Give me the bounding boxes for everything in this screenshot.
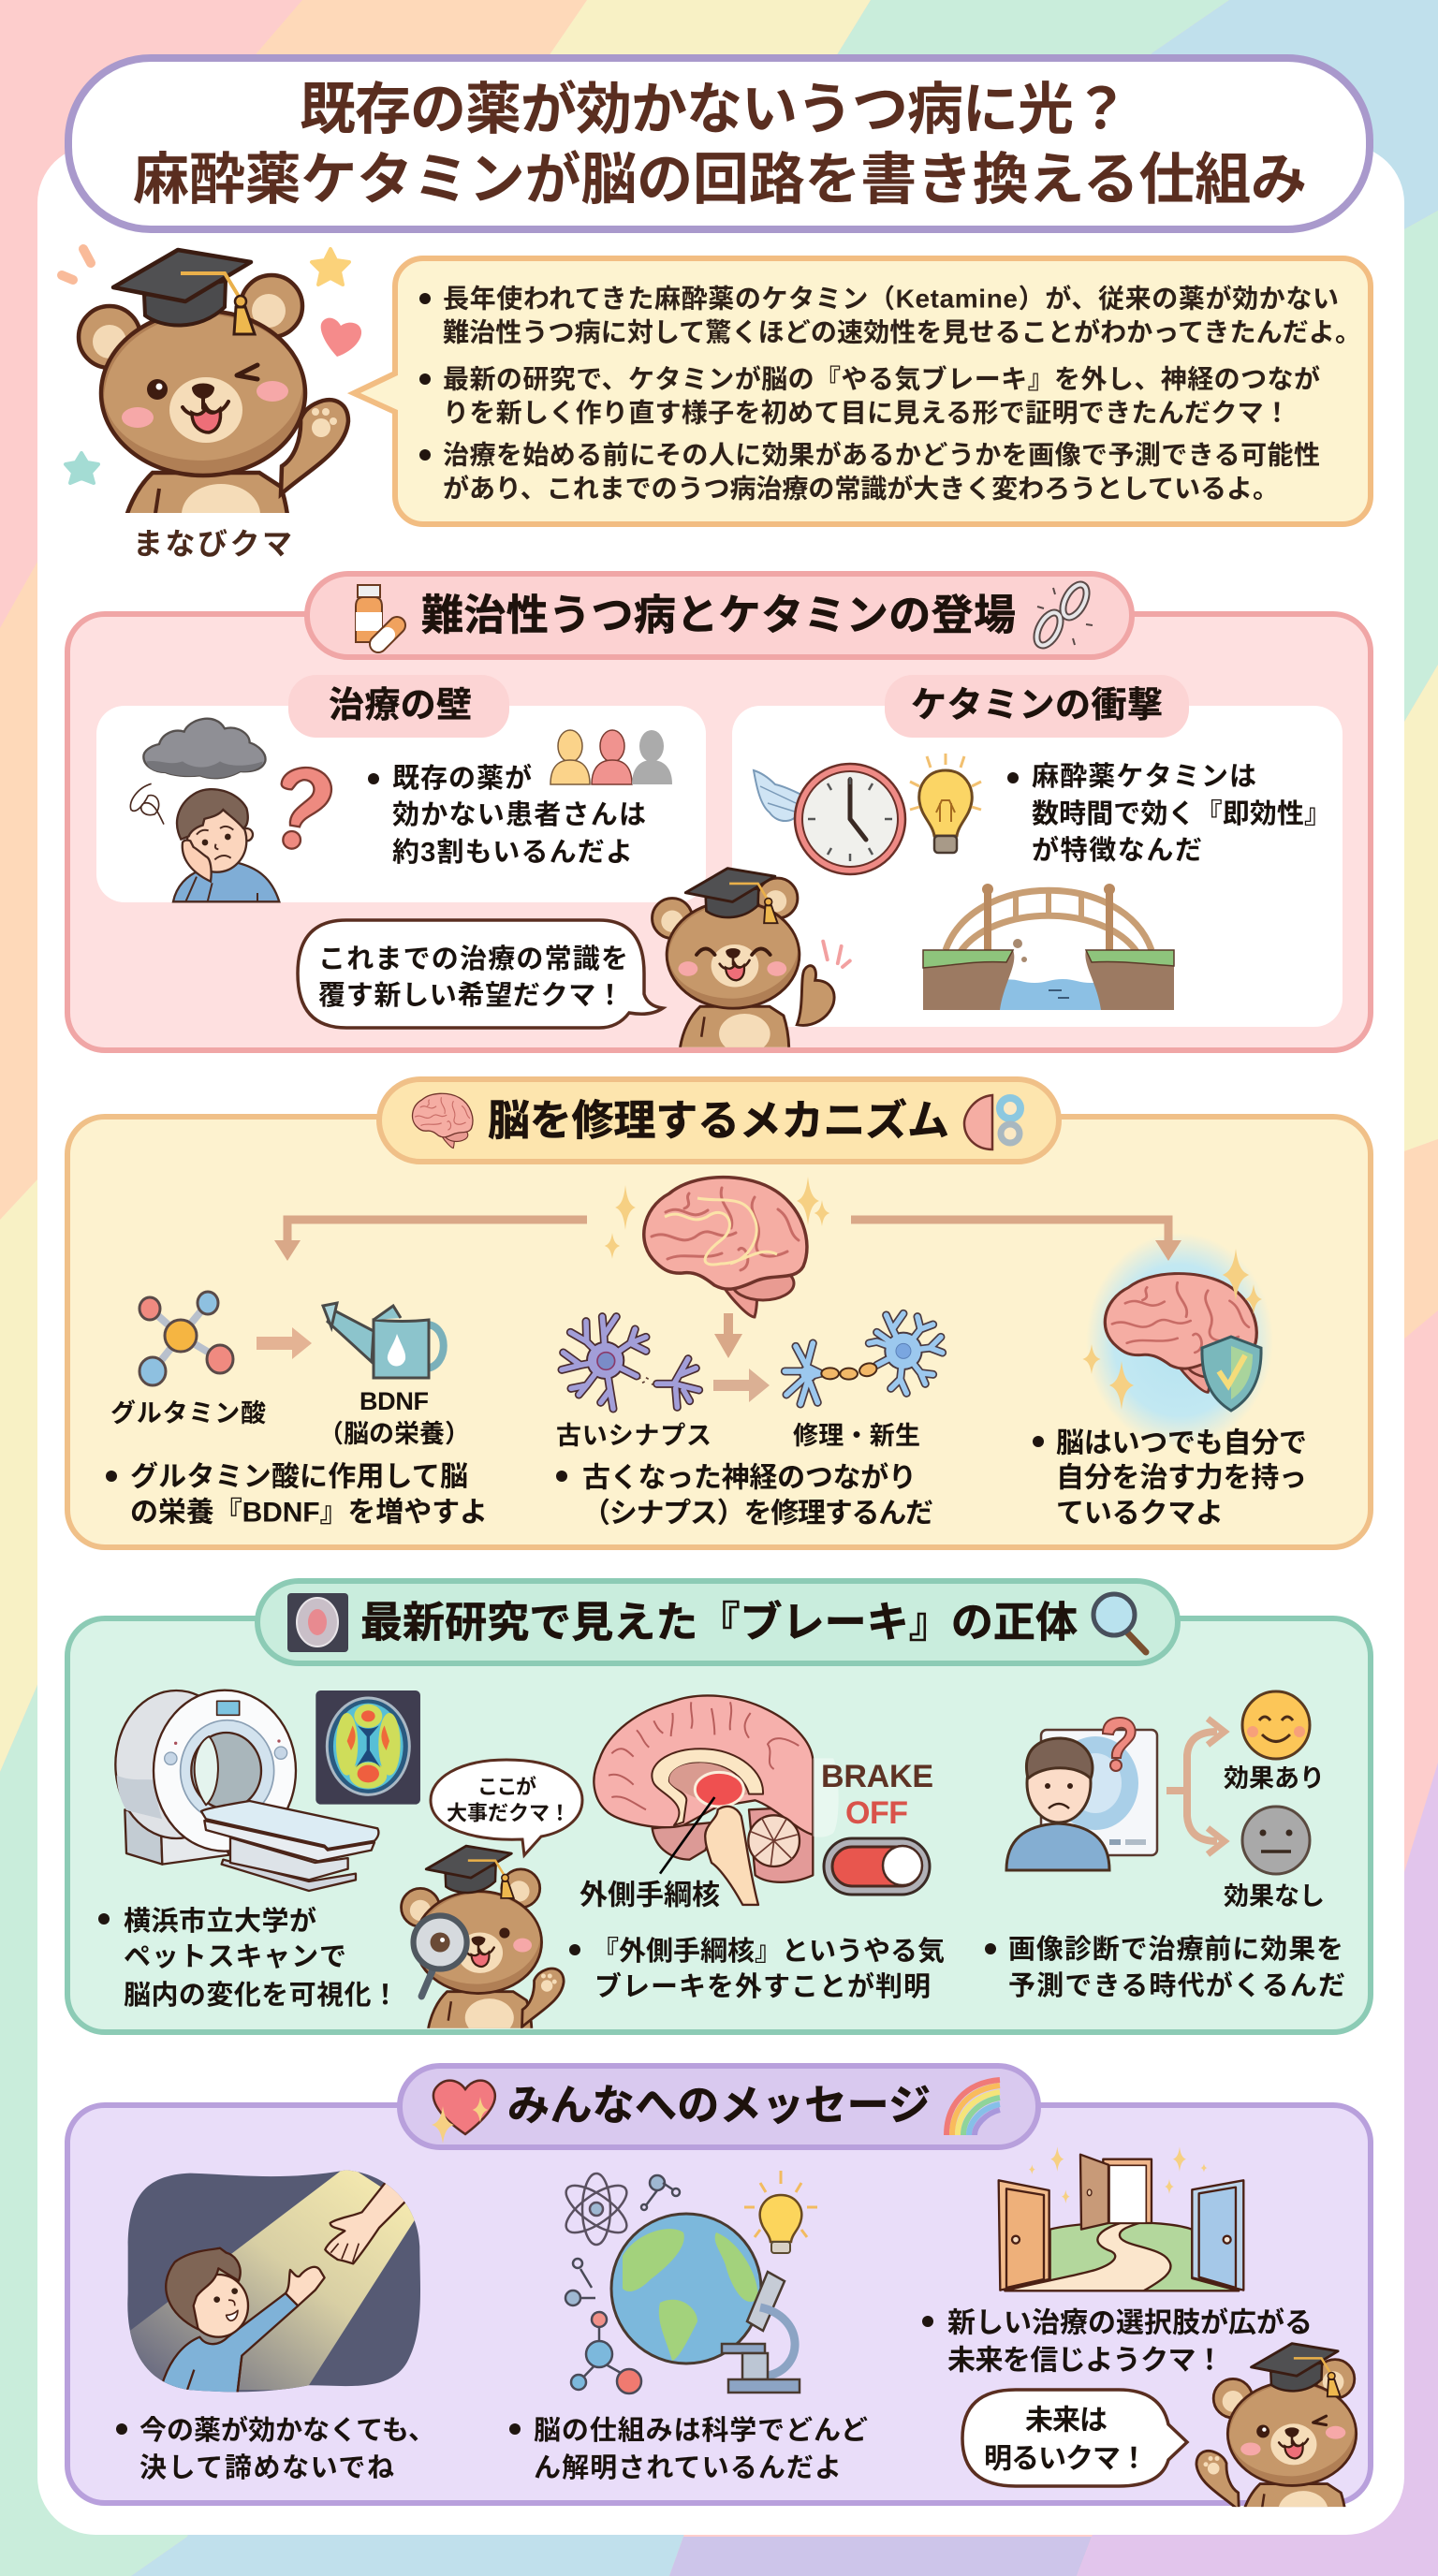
icon: cloud (143, 719, 266, 778)
tab (288, 675, 509, 738)
icon: patient with scan (1006, 1718, 1157, 1870)
icon: happy face (1242, 1691, 1310, 1759)
mascot: winking bear (1196, 2344, 1357, 2530)
text: prediction: 予測できる時代がくるんだ (1008, 1969, 1345, 2001)
card: ketamine impact (732, 675, 1343, 1027)
icon: broken bridge (923, 884, 1174, 1010)
text: bullets: グルタミン酸に作用して脳 (130, 1462, 468, 1492)
icon: question mark (282, 768, 331, 849)
intro speech box: 難治性うつ病に対して驚くほどの速効性を見せることがわかってきたんだよ。 (443, 316, 1361, 346)
speech bubble: bright future: 未来は (1025, 2406, 1108, 2436)
intro speech box: 長年使われてきた麻酔薬のケタミン（Ketamine）が、従来の薬が効かない (443, 283, 1339, 313)
icon: glutamate molecule (139, 1292, 233, 1385)
text: science: 脳の仕組みは科学でどんど (534, 2415, 868, 2446)
intro speech box: りを新しく作り直す様子を初めて目に見える形で証明できたんだクマ！ (443, 399, 1290, 427)
arrows: prediction branches (1167, 1719, 1225, 1854)
labels (110, 1387, 920, 1450)
speech bubble: important: 大事だクマ！ (447, 1801, 570, 1825)
icon: microscope (722, 2272, 800, 2393)
illustration: doors of the future (999, 2146, 1243, 2291)
icon: magnifier (1093, 1594, 1146, 1652)
icon: atom (559, 2174, 634, 2245)
speech bubble: bright future (962, 2390, 1187, 2486)
heading (257, 1581, 1178, 1663)
text (1007, 761, 1331, 866)
arrow: glutamate to BDNF (257, 1327, 312, 1359)
text: prediction (985, 1934, 1345, 2001)
title (68, 58, 1370, 229)
icon: protected brain (1082, 1233, 1273, 1448)
heading: 最新研究で見えた『ブレーキ』の正体 (360, 1599, 1078, 1646)
labels: グルタミン酸 (110, 1398, 266, 1427)
text: 麻酔薬ケタミンは (1032, 761, 1256, 792)
icon: decorations (62, 249, 361, 483)
brake off switch (821, 1759, 933, 1895)
mascot: bear with magnifier (402, 1846, 564, 2037)
panel: brain repair mechanism (67, 1079, 1371, 1547)
intro speech box: 最新の研究で、ケタミンが脳の『やる気ブレーキ』を外し、神経のつなが (443, 363, 1320, 393)
speech bubble: important: ここが (477, 1775, 536, 1799)
arrows from brain (274, 1220, 1181, 1358)
icon: PET scanner (115, 1690, 378, 1891)
text: habenula (569, 1936, 945, 2002)
text: scanner (98, 1905, 399, 2011)
card: treatment wall (96, 675, 706, 902)
icon: medicine bottle (356, 585, 397, 644)
text: 既存の薬が (392, 762, 532, 794)
text: bullets: 脳はいつでも自分で (1056, 1428, 1307, 1458)
label: not effective: 効果なし (1224, 1882, 1325, 1910)
brake off switch: OFF (845, 1795, 908, 1831)
text: 数時間で効く『即効性』 (1032, 798, 1331, 829)
heading: みんなへのメッセージ (507, 2082, 931, 2129)
text: bullets: ているクマよ (1056, 1498, 1224, 1530)
tab (885, 675, 1189, 738)
text: scanner: ペットスキャンで (124, 1942, 346, 1972)
heading: 脳を修理するメカニズム (488, 1097, 949, 1144)
illustration: science globe (559, 2171, 817, 2393)
text: bullets: 自分を治す力を持っ (1056, 1462, 1307, 1494)
mascot: thumbs-up bear (653, 869, 850, 1054)
intro speech box: があり、これまでのうつ病治療の常識が大きく変わろうとしているよ。 (443, 474, 1279, 504)
speech bubble: important (431, 1760, 582, 1855)
text: scanner: 横浜市立大学が (124, 1905, 316, 1937)
icon: globe (611, 2214, 761, 2364)
text: do not give up: 今の薬が効かなくても、 (139, 2414, 435, 2446)
text: habenula: ブレーキを外すことが判明 (594, 1970, 931, 2002)
text: prediction: 画像診断で治療前に効果を (1008, 1934, 1343, 1965)
text: new options (922, 2306, 1313, 2376)
heading (307, 574, 1132, 657)
speech bubble: これまでの治療の常識を (318, 944, 628, 974)
heading (379, 1079, 1059, 1162)
text: do not give up: 決して諦めないでね (139, 2452, 394, 2483)
heading (400, 2066, 1038, 2147)
labels: BDNF (360, 1387, 429, 1415)
icon: bulb (744, 2171, 817, 2253)
speech bubble (298, 920, 663, 1028)
intro speech box (354, 258, 1371, 524)
speech bubble: bright future: 明るいクマ！ (984, 2443, 1148, 2475)
illustration: reaching hand in the light (127, 2165, 420, 2395)
speech bubble: 覆す新しい希望だクマ！ (318, 980, 624, 1011)
arrow: old to new synapse (713, 1368, 770, 1402)
tab: ケタミンの衝撃 (911, 686, 1163, 725)
icon: watering can (323, 1303, 444, 1378)
icon: broken chain (1032, 581, 1093, 649)
icon: sagittal brain (594, 1695, 839, 1905)
text: bullets (106, 1428, 1307, 1530)
panel: message to everyone (67, 2066, 1371, 2530)
text: bullets: の栄養『BDNF』を増やすよ (130, 1498, 488, 1528)
labels: 修理・新生 (793, 1422, 920, 1450)
mascot: manabi bear (62, 249, 361, 546)
labels: 古いシナプス (556, 1422, 712, 1450)
icon: rainbow (946, 2080, 1000, 2135)
icon: glowing brain (605, 1177, 829, 1317)
icon: brain scan thumbnail (287, 1593, 348, 1652)
text: scanner: 脳内の変化を可視化！ (124, 1980, 399, 2011)
text (368, 762, 646, 868)
icon: heart with sparkles (432, 2081, 495, 2144)
text: 約3割もいるんだよ (392, 837, 633, 868)
title: 既存の薬が効かないうつ病に光？ (300, 79, 1129, 140)
text: 効かない患者さんは (392, 799, 646, 830)
icon: brain with bandage (413, 1093, 473, 1148)
icon: PET image (315, 1690, 420, 1805)
panel: latest research (67, 1581, 1371, 2037)
text: new options: 未来を信じようクマ！ (947, 2346, 1224, 2376)
icon: winged clock (754, 764, 905, 874)
icon: three people (550, 730, 672, 784)
label: effective: 効果あり (1224, 1764, 1325, 1793)
brake off switch: BRAKE (821, 1759, 933, 1794)
icon: worried person (130, 783, 279, 901)
text: bullets: 古くなった神経のつながり (582, 1462, 917, 1494)
panel: refractory depression and ketamine (67, 574, 1371, 1054)
labels: （脳の栄養） (318, 1420, 470, 1448)
text: do not give up (116, 2414, 435, 2483)
text: science: ん解明されているんだよ (534, 2452, 842, 2483)
text: habenula: 『外側手綱核』というやる気 (592, 1936, 945, 1967)
text: が特徴なんだ (1032, 834, 1202, 866)
label: lateral habenula: 外側手綱核 (580, 1880, 720, 1911)
text: bullets: （シナプス）を修理するんだ (582, 1498, 933, 1530)
text: science (509, 2415, 868, 2483)
heading: 難治性うつ病とケタミンの登場 (421, 592, 1016, 638)
mascot name: まなびクマ (133, 527, 292, 561)
title: 麻酔薬ケタミンが脳の回路を書き換える仕組み (133, 148, 1307, 212)
icon: light bulb (910, 754, 981, 853)
icon: small molecules (565, 2175, 680, 2393)
icon: old neuron (562, 1317, 699, 1409)
icon: neutral face (1242, 1807, 1310, 1874)
tab: 治療の壁 (329, 686, 472, 725)
text: new options: 新しい治療の選択肢が広がる (947, 2306, 1313, 2338)
icon: repaired neuron (785, 1313, 943, 1404)
intro speech box: 治療を始める前にその人に効果があるかどうかを画像で予測できる可能性 (443, 440, 1320, 470)
icon: brain with gears (964, 1095, 1020, 1149)
